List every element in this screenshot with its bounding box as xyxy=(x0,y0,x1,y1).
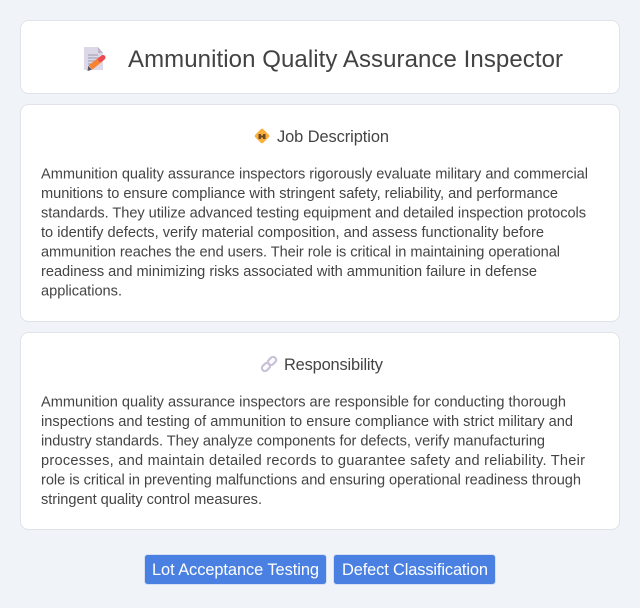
text block: responsibility: inspections and testing of ammunition to ensure compliance with strict military and xyxy=(41,414,573,430)
panel: job description xyxy=(20,104,620,322)
text block: job description: applications. xyxy=(41,283,122,299)
panel: title card xyxy=(20,20,620,94)
icon: orange diamond xyxy=(254,128,270,144)
text block: responsibility: stringent quality control measures. xyxy=(41,492,262,508)
icon: chain link xyxy=(261,356,277,372)
heading: responsibility: Responsibility xyxy=(284,356,384,374)
text block: responsibility: industry standards. They analyze components for defects, verify manufacturing xyxy=(41,433,545,449)
button: lot acceptance testing: Lot Acceptance Testing xyxy=(152,561,319,579)
text block: job description: standards. They utilize advanced testing equipment and detailed inspection protocols xyxy=(41,205,586,221)
text block: job description: readiness and minimizing risks associated with ammunition failure in defense xyxy=(41,264,537,280)
title: Ammunition Quality Assurance Inspector xyxy=(128,46,563,73)
button: defect classification: Defect Classification xyxy=(342,561,488,579)
text block: job description xyxy=(41,166,588,299)
text block: responsibility: Ammunition quality assurance inspectors are responsible for conducting thorough xyxy=(41,394,566,410)
text block: job description: ammunition reaches the end users. Their role is critical in maintaining operational xyxy=(41,244,560,260)
text block: responsibility xyxy=(41,394,585,508)
text block: job description: to identify defects, verify material composition, and assess functionality before xyxy=(41,225,544,241)
heading: job description: Job Description xyxy=(277,128,389,146)
text block: responsibility: processes, and maintain detailed records to guarantee safety and reliability. Their xyxy=(41,453,585,469)
icon: document with pencil xyxy=(84,47,103,71)
text block: job description: Ammunition quality assurance inspectors rigorously evaluate military and commercial xyxy=(41,166,588,182)
button: lot acceptance testing xyxy=(144,554,326,584)
text block: responsibility: role is critical in preventing malfunctions and ensuring operational readiness through xyxy=(41,472,581,488)
button: defect classification xyxy=(334,554,496,584)
panel: responsibility xyxy=(20,332,620,530)
text block: job description: munitions to ensure compliance with stringent safety, reliability, and performance xyxy=(41,186,558,202)
